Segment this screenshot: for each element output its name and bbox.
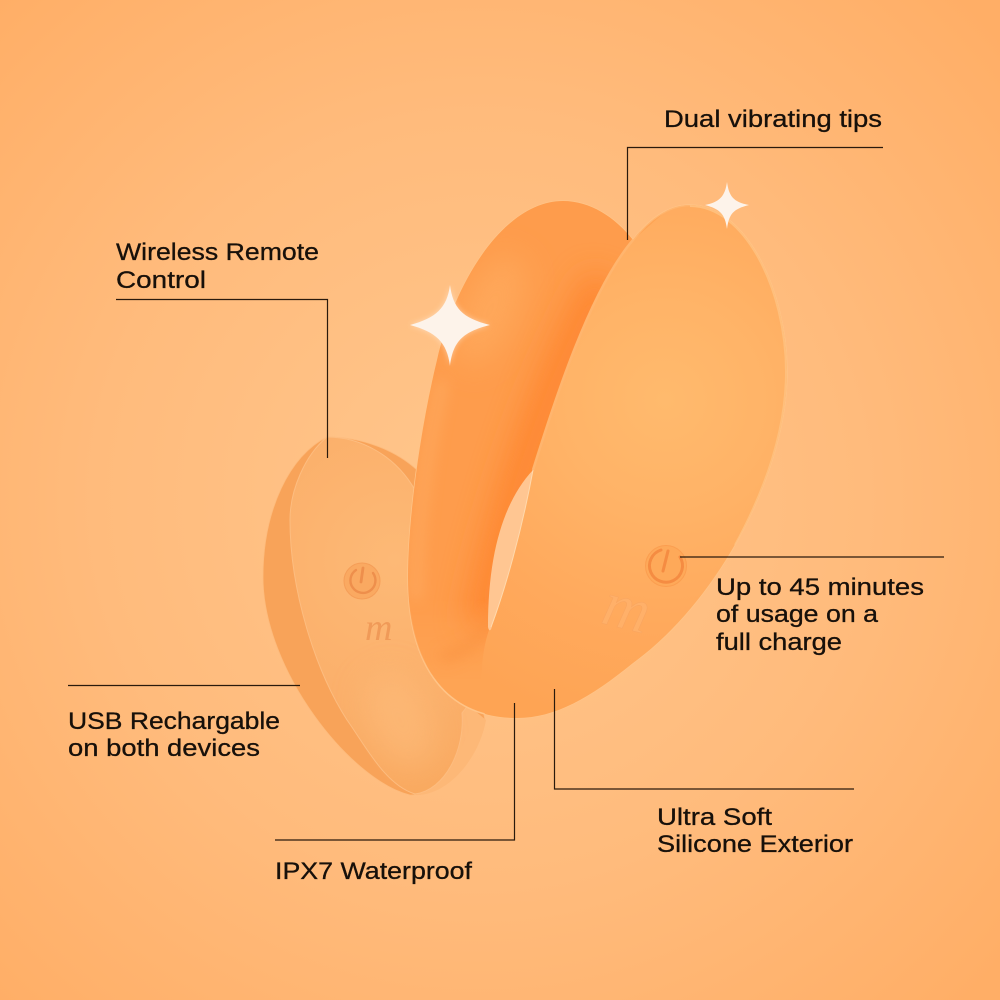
leader line: usb [68, 684, 300, 686]
device logo: m [596, 567, 658, 647]
leader line: battery [680, 556, 944, 558]
label: battery life [716, 574, 924, 656]
remote power icon [344, 563, 380, 599]
body silhouette [408, 201, 787, 718]
label: wireless remote control [116, 239, 319, 294]
back arm shading [400, 190, 640, 680]
label: usb rechargable: on both devices [68, 735, 260, 762]
label: battery life: Up to 45 minutes [716, 574, 924, 601]
arm left edge light [416, 380, 443, 600]
leader line: waterproof [275, 703, 514, 840]
label: silicone exterior [657, 804, 853, 858]
device power icon [646, 546, 686, 586]
remote back shell [263, 437, 485, 795]
remote logo: m [365, 607, 392, 649]
sparkle: small [705, 182, 749, 229]
label: battery life: of usage on a [716, 601, 878, 628]
gap between arms [488, 470, 533, 630]
label: waterproof: IPX7 Waterproof [275, 858, 472, 885]
label: battery life: full charge [716, 629, 842, 656]
body shading [408, 201, 787, 718]
remote face highlight [380, 698, 424, 756]
shadow along fold [482, 280, 605, 630]
leader line: dual vibrating tips [628, 148, 883, 240]
label: usb rechargable: USB Rechargable [68, 708, 280, 735]
arm base tone [400, 190, 640, 680]
label: wireless remote control: Control [116, 267, 206, 294]
remote lower right rim [415, 700, 486, 795]
leader line: wireless remote [116, 300, 328, 458]
sparkle: large [410, 285, 490, 366]
lobe right edge highlight [690, 206, 786, 545]
gap light edge [491, 470, 533, 627]
leader line: silicone [554, 689, 854, 789]
label: usb rechargable [68, 708, 280, 762]
remote front face [290, 437, 480, 794]
crease shadow under gap [440, 612, 492, 658]
label: silicone exterior: Ultra Soft [657, 804, 772, 831]
label: silicone exterior: Silicone Exterior [657, 831, 853, 858]
main device body [407, 201, 788, 718]
front lobe [484, 205, 787, 718]
sparkle: large glow [410, 285, 490, 366]
remote control [263, 437, 486, 795]
label: dual vibrating tips: Dual vibrating tips [664, 106, 882, 133]
lobe edge highlight [533, 205, 690, 470]
arm highlight [462, 266, 519, 354]
label: wireless remote control: Wireless Remote [116, 239, 319, 266]
